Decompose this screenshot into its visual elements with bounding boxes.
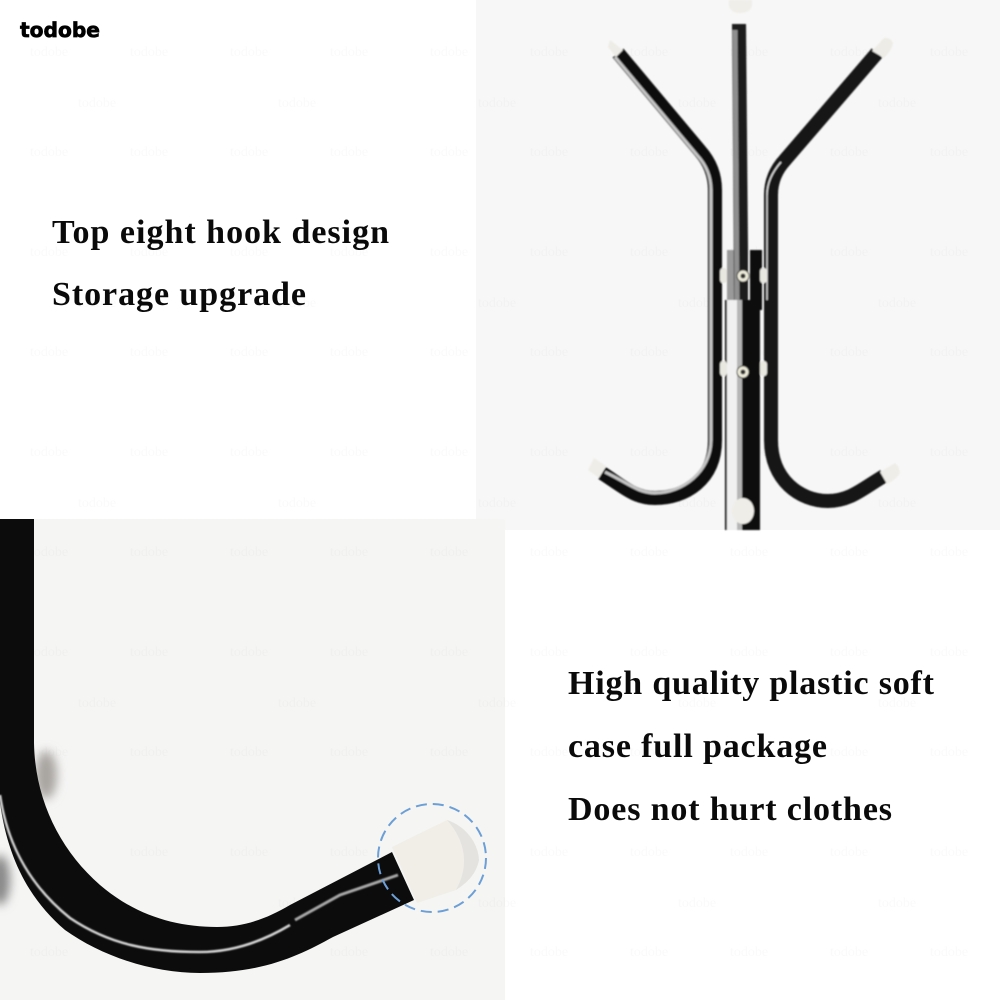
- left arm and lower left hook: [588, 40, 715, 498]
- text: case full package: case full package: [568, 728, 827, 765]
- heading: top eight hook design: Top eight hook design: [52, 214, 389, 251]
- top center hook cap: [729, 0, 752, 13]
- front lower hook cap: [732, 498, 754, 524]
- center pole and bracket: [725, 24, 762, 530]
- heading: top eight hook design: [52, 214, 389, 313]
- illustration: coat rack top with eight hooks: [588, 0, 900, 530]
- text: does not hurt clothes: Does not hurt clothes: [568, 791, 892, 828]
- white plastic cap: [392, 820, 479, 903]
- end tube highlight: [295, 875, 398, 920]
- panel: bottom left photo background: [0, 519, 505, 1000]
- vertical tube highlight: [13, 519, 17, 745]
- text: storage upgrade: Storage upgrade: [52, 276, 306, 313]
- text: high quality plastic soft case: [568, 665, 935, 828]
- logo: todobe: [20, 18, 100, 42]
- curved tube highlight: [0, 795, 290, 952]
- blurred background hook: [35, 751, 57, 799]
- right arm and lower right hook: [767, 38, 900, 501]
- illustration: close-up of hook with soft cap: [0, 519, 486, 973]
- mounting bolts and clips: [720, 268, 767, 378]
- dashed callout circle: [378, 804, 486, 912]
- text: high quality plastic soft case: High quality plastic soft: [568, 665, 935, 702]
- panel: top right photo background: [476, 0, 1000, 530]
- blurred dark shadow: [0, 855, 10, 905]
- cap end face: [447, 820, 479, 890]
- black hook tube: [0, 519, 414, 973]
